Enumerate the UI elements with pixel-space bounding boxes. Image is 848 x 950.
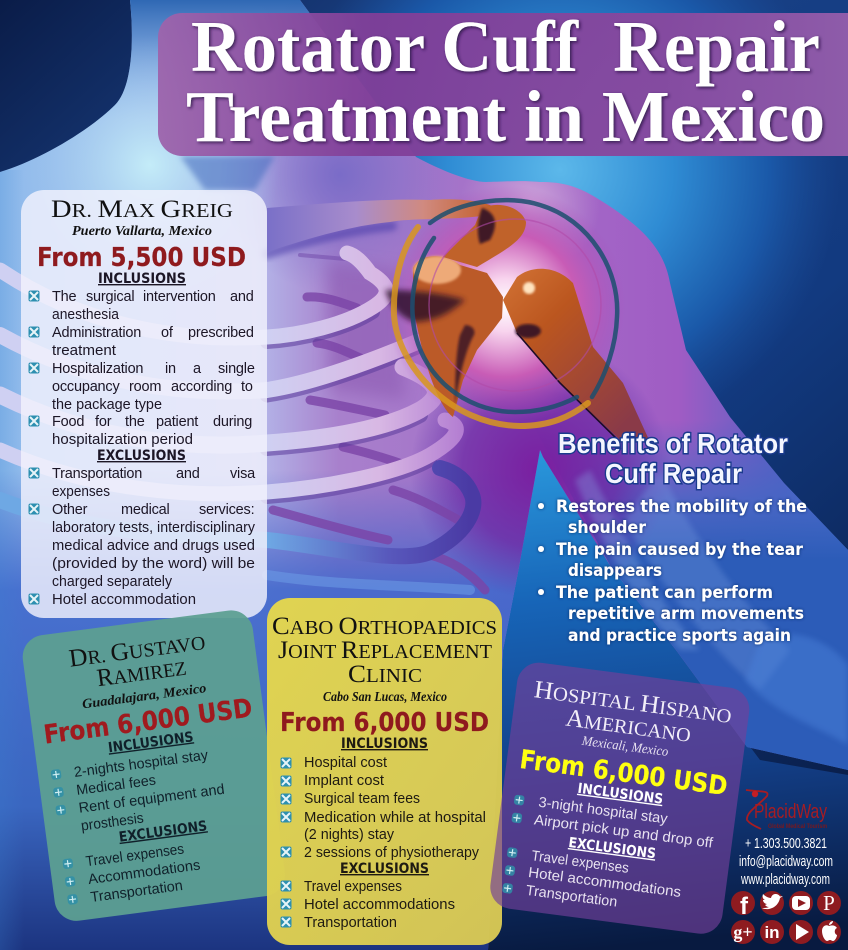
- doctor name: [67, 628, 210, 695]
- inclusions list: room: [129, 379, 161, 395]
- exclusions list: expenses: [52, 484, 110, 500]
- exclusions list: [280, 861, 455, 931]
- inclusions list: surgical: [86, 289, 134, 305]
- exclusions list: Transportation: [52, 466, 142, 482]
- doctor name: DR. MAX GREIG: [51, 196, 233, 223]
- exclusions list: Transportation: [525, 883, 618, 911]
- inclusions list: [280, 736, 486, 861]
- exclusions list: EXCLUSIONS: [340, 861, 429, 877]
- inclusions list: hospitalization period: [52, 432, 193, 448]
- clavicle bone: [267, 199, 492, 252]
- location: Puerto Vallarta, Mexico: [72, 223, 212, 238]
- acromion: [443, 205, 526, 267]
- exclusions list: EXCLUSIONS: [118, 818, 208, 846]
- inclusions list: of: [161, 325, 174, 341]
- exclusions list: laboratory tests, interdisciplinary: [52, 520, 256, 536]
- clinic name: [272, 613, 497, 688]
- exclusions list: and: [176, 466, 200, 482]
- benefits list: The pain caused by the tear: [556, 540, 804, 559]
- panel: Hospital Hispano Americano: [488, 660, 752, 936]
- location: Cabo San Lucas, Mexico: [323, 689, 447, 704]
- inclusions list: patient: [156, 414, 198, 430]
- doctor name: DR. GUSTAVO: [67, 628, 207, 673]
- title: Rotator Cuff Repair: [191, 6, 820, 87]
- inclusions list: (2 nights) stay: [304, 827, 395, 843]
- price: From 6,000 USD: [518, 745, 729, 802]
- inclusions list: Hospitalization: [52, 361, 143, 377]
- location: Guadalajara, Mexico: [81, 680, 207, 711]
- logo: PlacidWay: [746, 790, 827, 830]
- benefits heading: Cuff Repair: [605, 458, 742, 489]
- exclusions list: [502, 827, 687, 919]
- icons: social media: [731, 891, 841, 944]
- title: Treatment in Mexico: [186, 76, 825, 157]
- icons: social media: in: [764, 923, 780, 942]
- panel: Cabo Orthopaedics Joint Replacement Clinic: [267, 598, 502, 945]
- inclusions list: The: [52, 289, 77, 305]
- inclusions list: [28, 271, 255, 448]
- inclusions list: Food: [52, 414, 84, 430]
- benefits list: Restores the mobility of the: [556, 497, 807, 516]
- inclusions list: Medication while at hospital: [304, 810, 486, 826]
- inclusions list: [511, 773, 720, 852]
- exclusions list: Travel expenses: [530, 848, 630, 877]
- exclusions list: medical: [121, 502, 170, 518]
- icons: social media: P: [823, 891, 835, 915]
- inclusions list: Administration: [52, 325, 141, 341]
- inclusions list: a: [193, 361, 202, 377]
- inclusions list: INCLUSIONS: [577, 781, 664, 808]
- doctor name: RAMIREZ: [95, 654, 188, 692]
- title band: [158, 6, 848, 157]
- scapula: [413, 256, 503, 417]
- exclusions list: EXCLUSIONS: [567, 835, 657, 862]
- location: Mexicali, Mexico: [580, 733, 670, 759]
- inclusions list: INCLUSIONS: [341, 736, 428, 752]
- logo: PlacidWay: Global Medical Tourism: [768, 823, 827, 830]
- benefits heading: Benefits of Rotator: [558, 428, 788, 459]
- inclusions list: to: [241, 379, 253, 395]
- exclusions list: Hotel accommodations: [304, 897, 455, 913]
- inclusions list: according: [171, 379, 232, 395]
- exclusions list: Other: [52, 502, 88, 518]
- clinic name: JOINT REPLACEMENT: [278, 637, 492, 664]
- price: From 6,000 USD: [280, 708, 489, 738]
- exclusions list: medical advice and drugs used: [52, 538, 255, 554]
- inclusions list: 2 sessions of physiotherapy: [304, 845, 480, 861]
- inclusions list: prosthesis: [80, 810, 145, 835]
- glow behind the joint: [385, 185, 625, 425]
- logo: PlacidWay: PlacidWay: [754, 801, 827, 823]
- inclusions list: INCLUSIONS: [98, 271, 186, 287]
- hospital name: [529, 676, 733, 753]
- inclusions list: Medical fees: [75, 773, 157, 799]
- inclusions list: occupancy: [52, 379, 120, 395]
- icons: social media: g+: [733, 922, 753, 942]
- hospital name: HOSPITAL HISPANO: [532, 676, 733, 729]
- rings around the joint: [394, 200, 617, 426]
- ribs: [0, 226, 485, 590]
- panel: Dr. Gustavo Ramirez: [20, 608, 288, 924]
- inclusions list: intervention: [143, 289, 216, 305]
- exclusions list: Hotel accommodations: [527, 865, 682, 901]
- panel: Dr. Max Greig: [21, 190, 267, 618]
- inclusions list: the package type: [52, 397, 162, 413]
- inclusions list: single: [218, 361, 255, 377]
- exclusions list: EXCLUSIONS: [97, 448, 186, 464]
- clinic name: CLINIC: [348, 661, 422, 688]
- exclusions list: Accommodations: [87, 857, 201, 888]
- humerus: [503, 269, 650, 442]
- clinic name: CABO ORTHOPAEDICS: [272, 613, 497, 640]
- benefits list: [538, 497, 807, 645]
- exclusions list: Transportation: [89, 878, 184, 906]
- inclusions list: treatment: [52, 343, 116, 359]
- exclusions list: Travel expenses: [85, 841, 185, 870]
- benefits list: repetitive arm movements: [568, 604, 804, 623]
- exclusions list: visa: [230, 466, 256, 482]
- inclusions list: Airport pick up and drop off: [533, 812, 715, 852]
- exclusions list: [59, 818, 216, 909]
- collarbone shade under the title: [180, 156, 275, 190]
- hospital name: AMERICANO: [564, 705, 693, 748]
- price: From 5,500 USD: [37, 243, 246, 273]
- panel: benefits of rotator cuff repair: [538, 428, 807, 645]
- inclusions list: the: [125, 414, 145, 430]
- benefits list: shoulder: [568, 518, 647, 537]
- inclusions list: during: [213, 414, 252, 430]
- price: From 6,000 USD: [42, 693, 254, 751]
- benefits list: The patient can perform: [556, 583, 773, 602]
- inclusions list: 3-night hospital stay: [537, 795, 669, 828]
- exclusions list: Travel expenses: [304, 879, 402, 895]
- title: [186, 6, 825, 157]
- inclusions list: 2-nights hospital stay: [73, 747, 210, 781]
- inclusions list: [48, 726, 228, 838]
- inclusions list: anesthesia: [52, 307, 120, 323]
- exclusions list: [28, 448, 256, 608]
- exclusions list: (provided by the word) will be: [52, 556, 255, 572]
- inclusions list: Hospital cost: [304, 755, 387, 771]
- inclusions list: INCLUSIONS: [107, 729, 194, 756]
- inclusions list: and: [230, 289, 254, 305]
- exclusions list: Hotel accommodation: [52, 592, 196, 608]
- inclusions list: prescribed: [188, 325, 254, 341]
- inclusions list: Rent of equipment and: [78, 782, 226, 817]
- benefits list: disappears: [568, 561, 662, 580]
- inclusions list: Surgical team fees: [304, 791, 420, 807]
- benefits heading: [558, 428, 788, 489]
- benefits list: and practice sports again: [568, 626, 791, 645]
- exclusions list: services:: [199, 502, 254, 518]
- exclusions list: Transportation: [304, 915, 397, 931]
- inclusions list: Implant cost: [304, 773, 384, 789]
- icons: social media: f: [740, 893, 749, 920]
- inclusions list: for: [95, 414, 112, 430]
- exclusions list: charged separately: [52, 574, 173, 590]
- inclusions list: in: [165, 361, 176, 377]
- contact details: [739, 835, 833, 888]
